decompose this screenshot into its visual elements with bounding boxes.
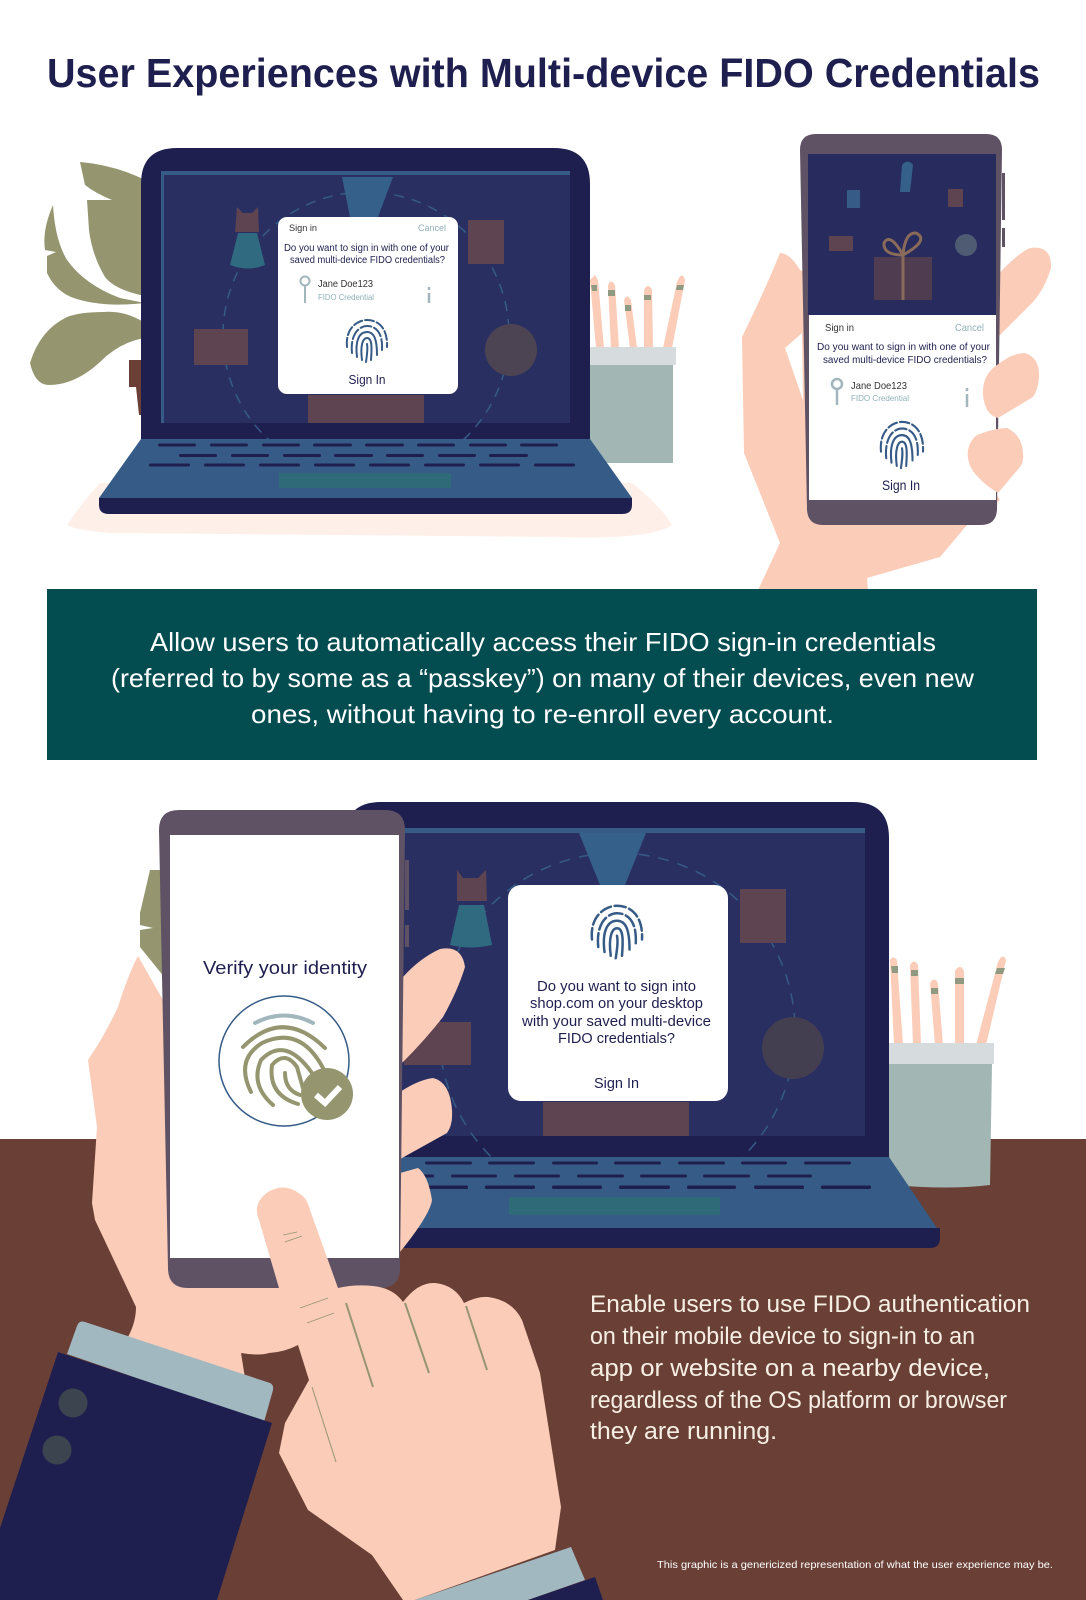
screen background products [194,177,537,478]
laptop trackpad [279,473,451,488]
title: User Experiences with Multi-device FIDO Credentials [47,50,1040,96]
icon: fingerprint [592,906,642,958]
icon: fingerprint [881,422,923,468]
plant pot [129,360,145,415]
sign-in dialog: Sign In [348,372,386,387]
lower finger behind phone [395,1168,432,1258]
screen background products [404,833,824,1209]
banner: passkey description: Allow users to automatically access their FIDO sign-in credentials [150,627,936,657]
description text: they are running. [590,1418,777,1445]
banner: passkey description: ones, without having to re-enroll every account. [251,699,834,729]
laptop trackpad [509,1197,720,1215]
laptop screen [370,833,865,1136]
phone dialog: Cancel [955,322,984,334]
thumb gap [785,333,803,400]
phone dialog: saved multi-device FIDO credentials? [823,354,987,366]
description text: app or website on a nearby device, [590,1355,990,1382]
sign-in dialog: Jane Doe123 [318,279,373,290]
upper finger behind phone [395,948,465,1068]
pencil cup [880,1043,994,1188]
verify fingerprint icon [219,996,353,1126]
icon: key [300,276,310,303]
check badge [301,1068,353,1120]
sign-in dialog: saved multi-device FIDO credentials? [290,255,445,266]
description text [590,1291,1030,1445]
icon: info [428,287,430,303]
phone screen top [808,154,996,315]
phone dialog: Sign in [825,322,854,334]
phone side buttons [405,860,409,947]
pencils [590,275,685,348]
screen top bar [370,828,865,833]
icon: key [832,379,842,405]
sign-in dialog: Sign In [594,1075,639,1092]
left sleeve cuff [67,1322,273,1422]
screen background gift and products [829,162,977,300]
phone side buttons [1002,173,1005,247]
sign-in dialog: Do you want to sign in with one of your [284,243,450,254]
phone body [800,134,1002,525]
desk background [0,1139,1086,1600]
knuckle lines [283,1232,487,1462]
laptop keyboard deck [99,439,632,498]
sign-in dialog: with your saved multi-device [521,1013,711,1030]
banner: passkey description [47,589,1037,760]
middle finger behind phone [395,1078,452,1165]
finger over phone [983,353,1039,418]
sign-in dialog: shop.com on your desktop [530,995,703,1012]
right hand pointing [257,1187,561,1600]
sign-in dialog [508,885,728,1101]
laptop lid [141,148,590,439]
phone screen [170,835,399,1258]
verify heading: Verify your identity [203,958,367,978]
illustration: laptop scene [30,148,685,538]
upper finger [995,248,1051,340]
laptop keyboard deck [300,1157,937,1228]
description text: regardless of the OS platform or browser [590,1387,1007,1414]
hand back [742,253,1000,590]
phone body [159,810,405,1288]
sleeve buttons [42,1388,88,1464]
left hand holding phone [88,956,395,1378]
phone dialog [809,315,996,500]
plant [30,162,145,385]
pencils [890,956,1006,1045]
laptop base [99,498,632,514]
left sleeve [0,1352,272,1600]
phone dialog: FIDO Credential [851,393,909,403]
sign-in dialog: FIDO Credential [318,292,374,302]
description text: Enable users to use FIDO authentication [590,1291,1030,1318]
sign-in dialog: FIDO credentials? [558,1030,675,1047]
banner: passkey description: (referred to by some as a “passkey”) on many of their devices, even new [111,663,974,693]
sign-in dialog [278,217,458,394]
pencil cup [585,347,676,463]
sign-in dialog: Do you want to sign into [537,978,696,995]
laptop keys [400,1162,871,1189]
icon: info [966,388,968,407]
laptop keys [149,444,575,466]
screen top bar [161,171,570,423]
laptop lid [345,802,889,1157]
illustration: phone in hand [742,134,1051,590]
right sleeve cuff [415,1547,585,1600]
phone dialog: Do you want to sign in with one of your [817,341,990,353]
sign-in dialog: Sign in [289,223,317,234]
footnote: This graphic is a genericized representation of what the user experience may be. [657,1559,1053,1571]
description text: on their mobile device to sign-in to an [590,1323,975,1350]
laptop screen [161,171,570,423]
desk shadow [67,483,672,538]
phone dialog: Sign In [882,478,920,493]
sign-in dialog: Cancel [418,223,446,234]
laptop base [300,1228,940,1248]
lower finger over phone [968,428,1023,493]
icon: fingerprint [347,320,387,362]
plant behind phone [140,870,165,1088]
right sleeve [528,1577,603,1600]
illustration: cross-device sign-in scene [0,802,1006,1600]
phone dialog: Jane Doe123 [851,380,907,392]
